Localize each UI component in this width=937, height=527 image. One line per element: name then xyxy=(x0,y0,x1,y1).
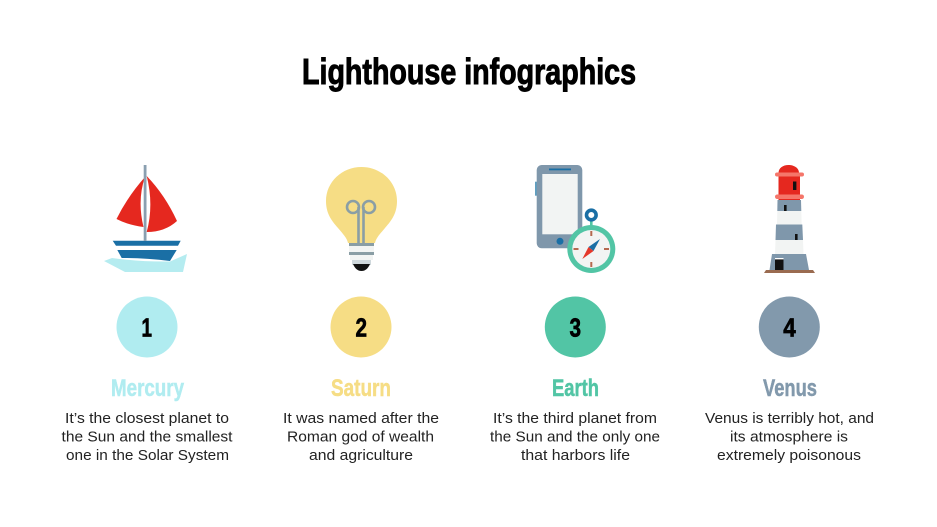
column: Earth xyxy=(490,165,660,464)
heading: Mercury: Mercury xyxy=(111,375,185,402)
number badge 3 xyxy=(545,296,606,358)
text block: Venus description: extremely poisonous xyxy=(717,448,861,464)
title: Lighthouse infographics xyxy=(302,51,636,92)
icon: sailboat xyxy=(104,165,187,272)
text block: Venus description: Venus is terribly hot, and xyxy=(705,411,874,427)
text block: Saturn description: It was named after the xyxy=(283,411,439,427)
text block: Earth description xyxy=(490,411,660,464)
column: Mercury xyxy=(62,165,232,464)
number badge 3: 3 xyxy=(570,312,581,342)
text block: Mercury description: It’s the closest planet to xyxy=(65,411,229,427)
number badge 2 xyxy=(330,296,392,358)
column: Saturn xyxy=(283,167,439,464)
number badge 4: 4 xyxy=(783,312,796,342)
heading: Saturn: Saturn xyxy=(331,375,391,402)
number badge 4 xyxy=(759,296,820,358)
heading: Venus: Venus xyxy=(763,375,817,402)
text block: Venus description: its atmosphere is xyxy=(730,430,848,446)
number badge 1 xyxy=(116,296,178,358)
text block: Mercury description: one in the Solar System xyxy=(66,448,229,464)
column: Venus xyxy=(705,165,874,464)
text block: Mercury description xyxy=(62,411,232,464)
text block: Earth description: It’s the third planet from xyxy=(493,411,657,427)
number badge 1: 1 xyxy=(142,312,152,342)
text block: Mercury description: the Sun and the smallest xyxy=(62,430,232,446)
text block: Saturn description: Roman god of wealth xyxy=(287,430,434,446)
text block: Earth description: the Sun and the only one xyxy=(490,430,660,446)
heading: Earth: Earth xyxy=(552,375,599,402)
number badge 2: 2 xyxy=(356,312,367,342)
icon: phone and compass xyxy=(535,165,615,273)
icon: lighthouse xyxy=(764,165,815,273)
text block: Earth description: that harbors life xyxy=(521,448,630,464)
text block: Venus description xyxy=(705,411,874,464)
text block: Saturn description xyxy=(283,411,439,464)
text block: Saturn description: and agriculture xyxy=(309,448,413,464)
icon: light bulb xyxy=(326,167,397,271)
